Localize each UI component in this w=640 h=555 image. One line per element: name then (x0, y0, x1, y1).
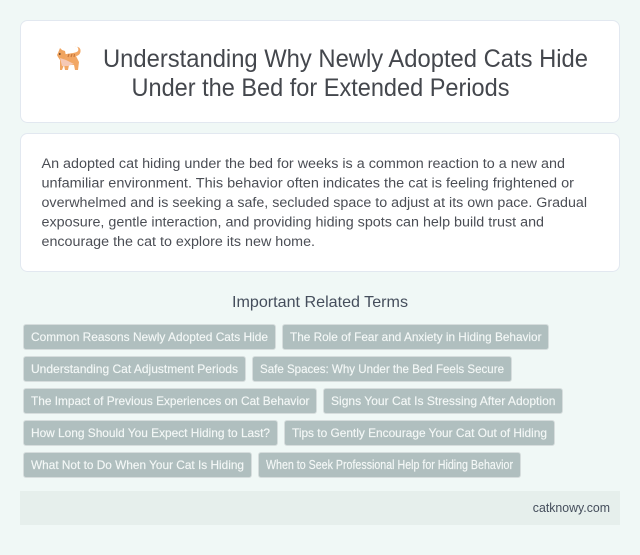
tag: Tips to Gently Encourage Your Cat Out of Hiding (292, 426, 547, 440)
tag (24, 324, 276, 350)
heading: related terms: Important Related Terms (232, 294, 408, 311)
tag: Understanding Cat Adjustment Periods (31, 362, 238, 376)
summary paragraph: unfamiliar environment. This behavior often indicates the cat is feeling frightened or (42, 174, 574, 190)
summary paragraph: An adopted cat hiding under the bed for weeks is a common reaction to a new and (42, 155, 565, 171)
tag: Common Reasons Newly Adopted Cats Hide (31, 330, 268, 344)
tag (282, 324, 548, 350)
summary paragraph (42, 155, 587, 249)
summary paragraph: overwhelmed and is seeking a safe, secluded space to adjust at its own pace. Gradual (42, 194, 587, 210)
icon: cat (57, 47, 81, 70)
tag (324, 388, 562, 414)
tag (252, 356, 512, 382)
tag (24, 452, 252, 478)
title: Under the Bed for Extended Periods (132, 74, 510, 102)
tag: Signs Your Cat Is Stressing After Adoption (331, 394, 556, 408)
panel: summary text (20, 134, 620, 272)
summary paragraph: exposure, gentle interaction, and providing hiding spots can help build trust and (42, 214, 544, 230)
title: Understanding Why Newly Adopted Cats Hide (103, 45, 588, 73)
summary paragraph: encourage the cat to explore its new home. (42, 233, 315, 249)
tag (24, 420, 278, 446)
tag: What Not to Do When Your Cat Is Hiding (31, 458, 244, 472)
tag (284, 420, 554, 446)
tag (258, 452, 520, 478)
footer source text: catknowy.com (533, 500, 610, 515)
panel: title card (20, 20, 620, 122)
tag: When to Seek Professional Help for Hiding Behavior (266, 457, 514, 472)
tag (24, 356, 246, 382)
tag: The Role of Fear and Anxiety in Hiding Behavior (290, 330, 542, 344)
tag: How Long Should You Expect Hiding to Last? (31, 426, 270, 440)
panel: related term tags (24, 324, 562, 478)
tag: The Impact of Previous Experiences on Cat Behavior (31, 394, 310, 408)
tag: Safe Spaces: Why Under the Bed Feels Secure (260, 362, 504, 376)
tag (24, 388, 316, 414)
footer bar (20, 491, 620, 525)
title (103, 45, 588, 102)
